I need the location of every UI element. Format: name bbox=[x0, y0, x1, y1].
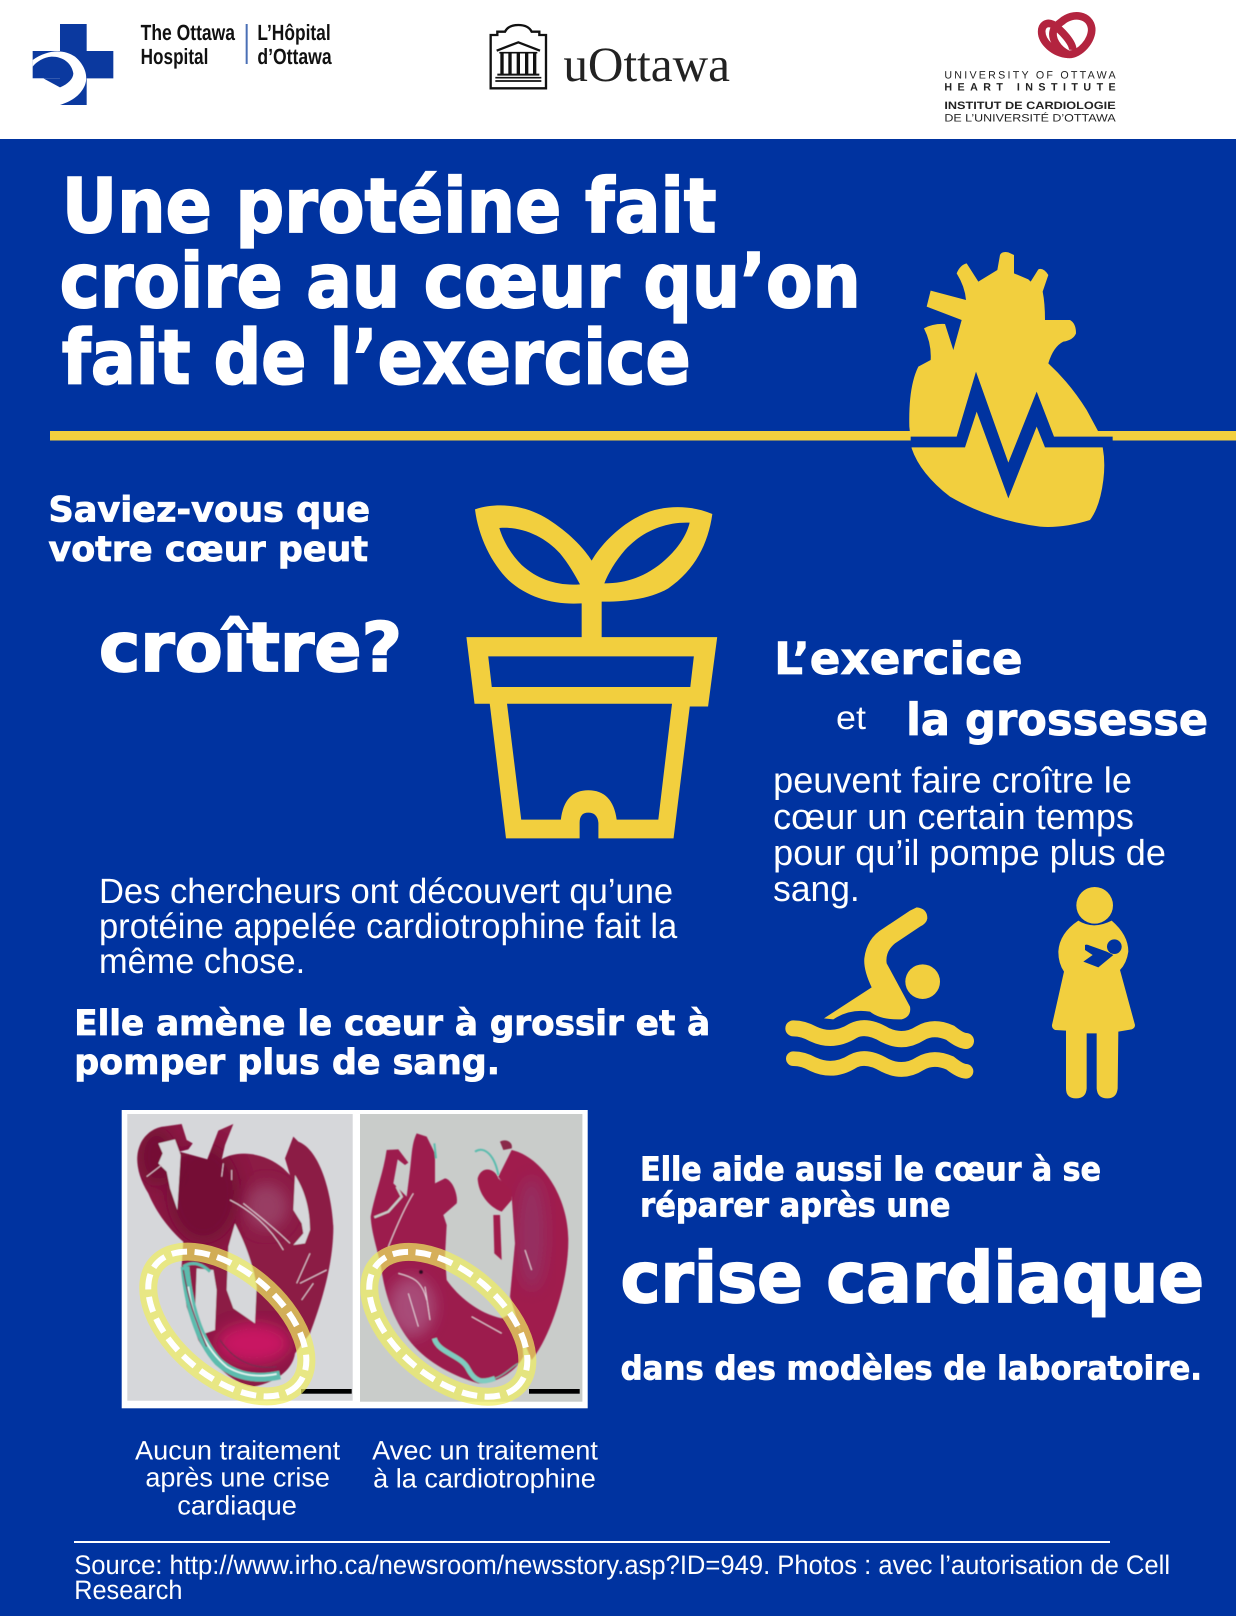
text: helps repair: Elle aide aussi le cœur à se bbox=[640, 1149, 1101, 1189]
source note: Source: http://www.irho.ca/newsroom/newsstory.asp?ID=949. Photos : avec l’autorisation de Cell bbox=[74, 1549, 1170, 1580]
text: can grow the heart: sang. bbox=[773, 869, 860, 909]
text: can grow the heart bbox=[773, 761, 1166, 909]
hospital name bbox=[141, 20, 332, 69]
text: helps repair bbox=[640, 1149, 1101, 1225]
source note bbox=[74, 1549, 1170, 1605]
uOttawa wordmark: uOttawa bbox=[563, 37, 730, 92]
heading: Saviez-vous bbox=[48, 490, 370, 570]
caption: with treatment bbox=[372, 1435, 599, 1494]
highlight ellipse: right bbox=[343, 1224, 554, 1425]
heading: Saviez-vous: Saviez-vous que bbox=[48, 490, 370, 531]
panel: cardiotrophin treatment bbox=[360, 1114, 582, 1402]
text: heart grows: pomper plus de sang. bbox=[74, 1042, 500, 1083]
text: heart grows: Elle amène le cœur à grossir et à bbox=[74, 1003, 710, 1044]
hospital name: d’Ottawa bbox=[257, 44, 332, 69]
yellow divider line bbox=[50, 431, 1236, 440]
text: researchers: même chose. bbox=[99, 942, 305, 981]
text: can grow the heart: cœur un certain temps bbox=[773, 797, 1134, 837]
caption: no treatment bbox=[135, 1435, 341, 1521]
hospital name: L’Hôpital bbox=[257, 20, 331, 45]
photo: heart sections bbox=[122, 1110, 588, 1425]
institute name: HEART INSTITUTE bbox=[944, 81, 1116, 93]
caption: no treatment: cardiaque bbox=[177, 1490, 297, 1521]
title: croire au cœur qu’on bbox=[60, 238, 861, 326]
icon: uOttawa building bbox=[491, 25, 546, 88]
text: lab models: dans des modèles de laboratoire. bbox=[621, 1348, 1202, 1388]
caption: no treatment: Aucun traitement bbox=[135, 1435, 341, 1466]
text: researchers: protéine appelée cardiotrophine fait la bbox=[99, 907, 677, 946]
icon: woman holding baby bbox=[1052, 887, 1135, 1098]
text: helps repair: réparer après une bbox=[640, 1185, 950, 1225]
text: can grow the heart: peuvent faire croître le bbox=[773, 761, 1132, 801]
source note: Research bbox=[74, 1574, 182, 1605]
logo: University of Ottawa Heart Institute bbox=[944, 16, 1116, 124]
heading: croître: croître? bbox=[99, 608, 402, 688]
icon: heart with heartbeat line bbox=[909, 252, 1113, 527]
icon: hospital cross bbox=[33, 24, 113, 105]
heading: Saviez-vous: votre cœur peut bbox=[48, 529, 368, 570]
title: Une protéine fait bbox=[62, 163, 716, 250]
icon: swimmer bbox=[793, 907, 966, 1071]
icon: red ring heart bbox=[1042, 16, 1092, 54]
institute name: INSTITUT DE CARDIOLOGIE bbox=[944, 99, 1116, 111]
heading: exercise and pregnancy: la grossesse bbox=[906, 695, 1208, 746]
heading: exercise and pregnancy bbox=[774, 634, 1208, 746]
logo: uOttawa bbox=[491, 25, 730, 92]
title bbox=[60, 163, 861, 402]
title: fait de l’exercice bbox=[62, 314, 691, 402]
logo: The Ottawa Hospital bbox=[33, 20, 332, 105]
institute name bbox=[944, 69, 1116, 124]
text: can grow the heart: pour qu’il pompe plus de bbox=[773, 833, 1166, 873]
text: heart grows bbox=[74, 1003, 710, 1083]
caption: no treatment: après une crise bbox=[145, 1462, 330, 1493]
text: researchers bbox=[99, 872, 677, 981]
heading: exercise and pregnancy: et bbox=[836, 699, 866, 736]
institute name: DE L’UNIVERSITÉ D’OTTAWA bbox=[944, 112, 1116, 124]
heading: crise cardiaque: crise cardiaque bbox=[621, 1238, 1204, 1320]
icon: potted plant bbox=[466, 505, 717, 838]
text: researchers: Des chercheurs ont découvert qu’une bbox=[99, 872, 673, 911]
caption: with treatment: Avec un traitement bbox=[372, 1435, 599, 1466]
highlight ellipse: left bbox=[122, 1223, 333, 1425]
caption: with treatment: à la cardiotrophine bbox=[373, 1463, 596, 1494]
hospital name: Hospital bbox=[141, 44, 208, 69]
panel: no treatment bbox=[127, 1114, 353, 1401]
heading: exercise and pregnancy: L’exercice bbox=[774, 634, 1023, 686]
hospital name: The Ottawa bbox=[141, 20, 235, 45]
institute name: UNIVERSITY OF OTTAWA bbox=[944, 69, 1116, 81]
